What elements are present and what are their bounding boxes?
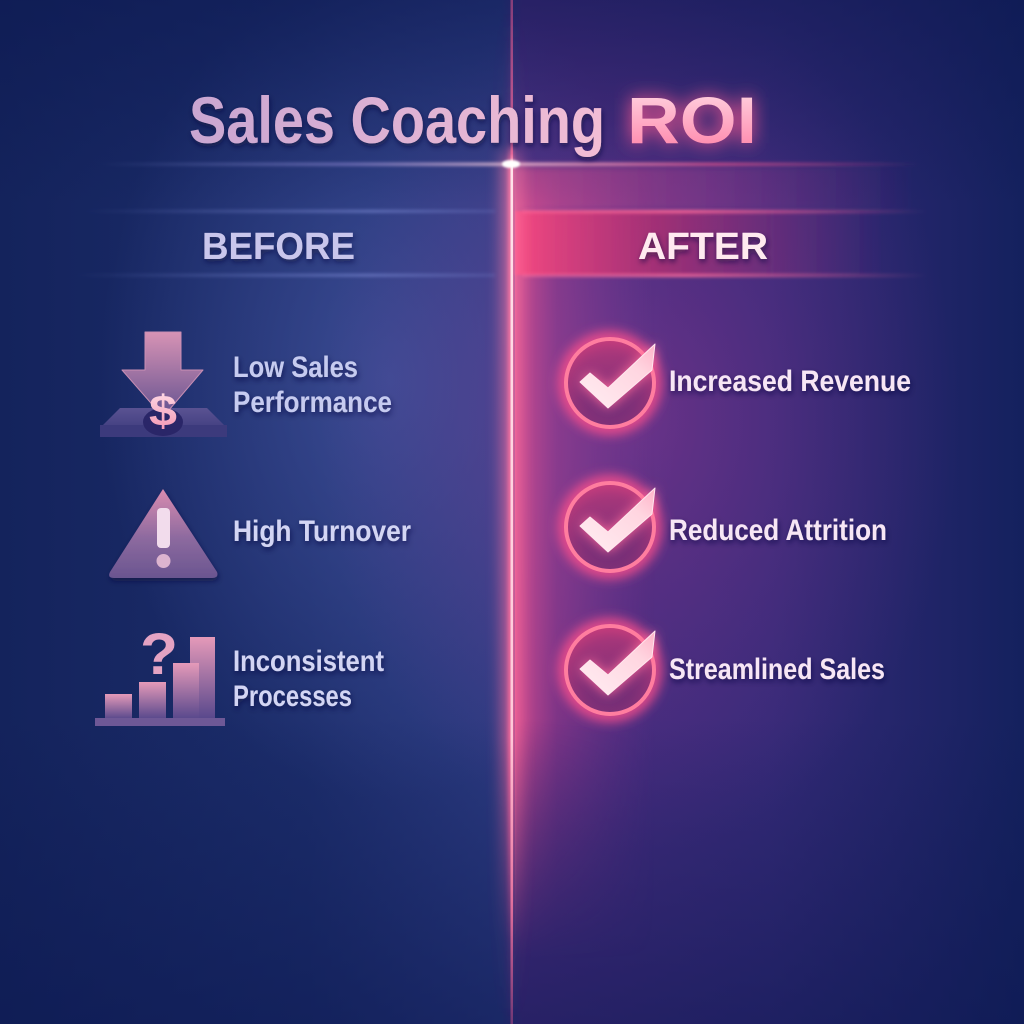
heading: before: BEFORE — [202, 226, 355, 268]
icon: bar chart with question mark — [95, 622, 225, 726]
icon: check 2 — [565, 482, 655, 572]
icon: check 3 — [565, 625, 655, 715]
label: increased revenue: Increased Revenue — [669, 365, 911, 398]
centre divider glow — [503, 0, 519, 1024]
icon: bar chart with question mark: ? — [140, 622, 178, 687]
label: low sales performance: Performance — [233, 386, 392, 419]
label: streamlined sales: Streamlined Sales — [669, 653, 885, 686]
title accent: ROI: ROI — [627, 83, 757, 157]
label: reduced attrition: Reduced Attrition — [669, 514, 887, 547]
title: Sales Coaching — [189, 83, 605, 157]
label: high turnover: High Turnover — [233, 515, 411, 548]
heading: after: AFTER — [638, 226, 768, 268]
title accent: ROI: ROI — [627, 83, 757, 157]
panel: after header band — [515, 166, 915, 275]
label: inconsistent processes: Inconsistent — [233, 645, 384, 678]
label: low sales performance: Low Sales — [233, 351, 358, 384]
icon: check 1 — [565, 338, 655, 428]
after header rules — [522, 210, 927, 277]
label: inconsistent processes: Processes — [233, 680, 352, 713]
icon: falling arrow with dollar: $ — [149, 387, 177, 436]
title divider line — [100, 160, 920, 168]
icon: warning triangle — [109, 489, 217, 578]
before header rules — [75, 210, 495, 276]
icon: falling arrow with dollar — [100, 332, 227, 437]
